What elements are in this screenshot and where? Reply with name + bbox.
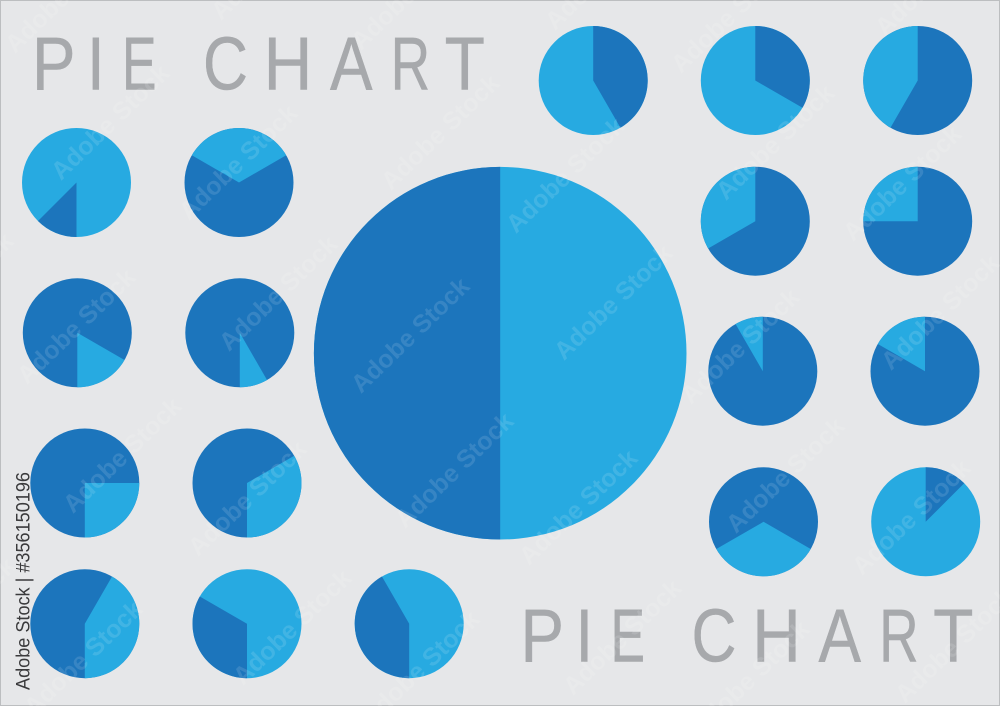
stock watermark pattern: Adobe Stock (558, 574, 687, 700)
stock watermark pattern: Adobe Stock (501, 112, 630, 238)
title: top left: R (391, 22, 430, 105)
title: top left: E (122, 22, 157, 106)
stock watermark pattern: Adobe Stock (390, 407, 519, 533)
title: bottom right: H (752, 594, 801, 678)
stock watermark pattern: Adobe Stock (12, 263, 141, 389)
title: top left: P (32, 21, 76, 106)
stock watermark pattern: Adobe Stock (721, 412, 850, 538)
pie 11: left column (184, 128, 294, 237)
vertical stock id label: Adobe Stock | #356150196 (14, 472, 34, 690)
pie 12: left column (23, 278, 132, 387)
title: top left: A (330, 22, 373, 106)
pie 4: right column (701, 167, 810, 276)
stock watermark pattern: Adobe Stock (346, 272, 475, 398)
pie 7: right column (870, 317, 980, 426)
title: top left: T (445, 22, 485, 105)
pie 5: right column (863, 167, 972, 276)
stock watermark pattern: Adobe Stock (58, 392, 187, 518)
pie 17: bottom row (192, 569, 302, 678)
stock watermark pattern: Adobe Stock (549, 239, 678, 365)
stock watermark pattern: Adobe Stock (46, 59, 175, 185)
stock watermark pattern: Adobe Stock (174, 99, 303, 225)
title: bottom right: E (610, 594, 645, 678)
pie 8: right column (709, 467, 818, 576)
pie 9: right column (871, 467, 980, 576)
title: bottom right: C (692, 594, 736, 678)
title: bottom right: T (933, 594, 973, 677)
stock watermark pattern: Adobe Stock (183, 435, 312, 561)
title: bottom right: P (520, 593, 564, 678)
stock watermark pattern: Adobe Stock (228, 564, 357, 690)
stock watermark pattern: Adobe Stock (838, 120, 967, 246)
title: bottom right: I (576, 594, 593, 678)
central pie chart 50/50 (314, 167, 686, 540)
title: top left: H (264, 22, 312, 106)
stock watermark pattern: Adobe Stock (711, 79, 840, 205)
pie 15: left column (192, 428, 302, 538)
stock watermark pattern: Adobe Stock (376, 69, 505, 195)
title: top left: I (87, 22, 105, 106)
title: top left: C (203, 22, 248, 106)
title: bottom right (520, 593, 973, 678)
stock watermark pattern: Adobe Stock (214, 230, 343, 356)
pie 3: top row right (863, 26, 972, 135)
pie 10: left column (22, 128, 131, 237)
stock watermark pattern: Adobe Stock (847, 454, 976, 580)
title: top left (32, 21, 485, 106)
title: bottom right: A (818, 594, 862, 678)
pie 1: top row left (539, 26, 648, 135)
stock watermark pattern: Adobe Stock (676, 283, 805, 409)
pie 14: left column (30, 428, 139, 538)
pie 18: bottom row (355, 569, 464, 678)
pie 2: top row middle (701, 26, 810, 135)
pie 16: bottom row (30, 569, 139, 678)
pie 13: left column (185, 278, 294, 387)
pie 6: right column (708, 317, 817, 426)
title: bottom right: R (879, 594, 919, 677)
stock watermark pattern: Adobe Stock (514, 444, 643, 570)
